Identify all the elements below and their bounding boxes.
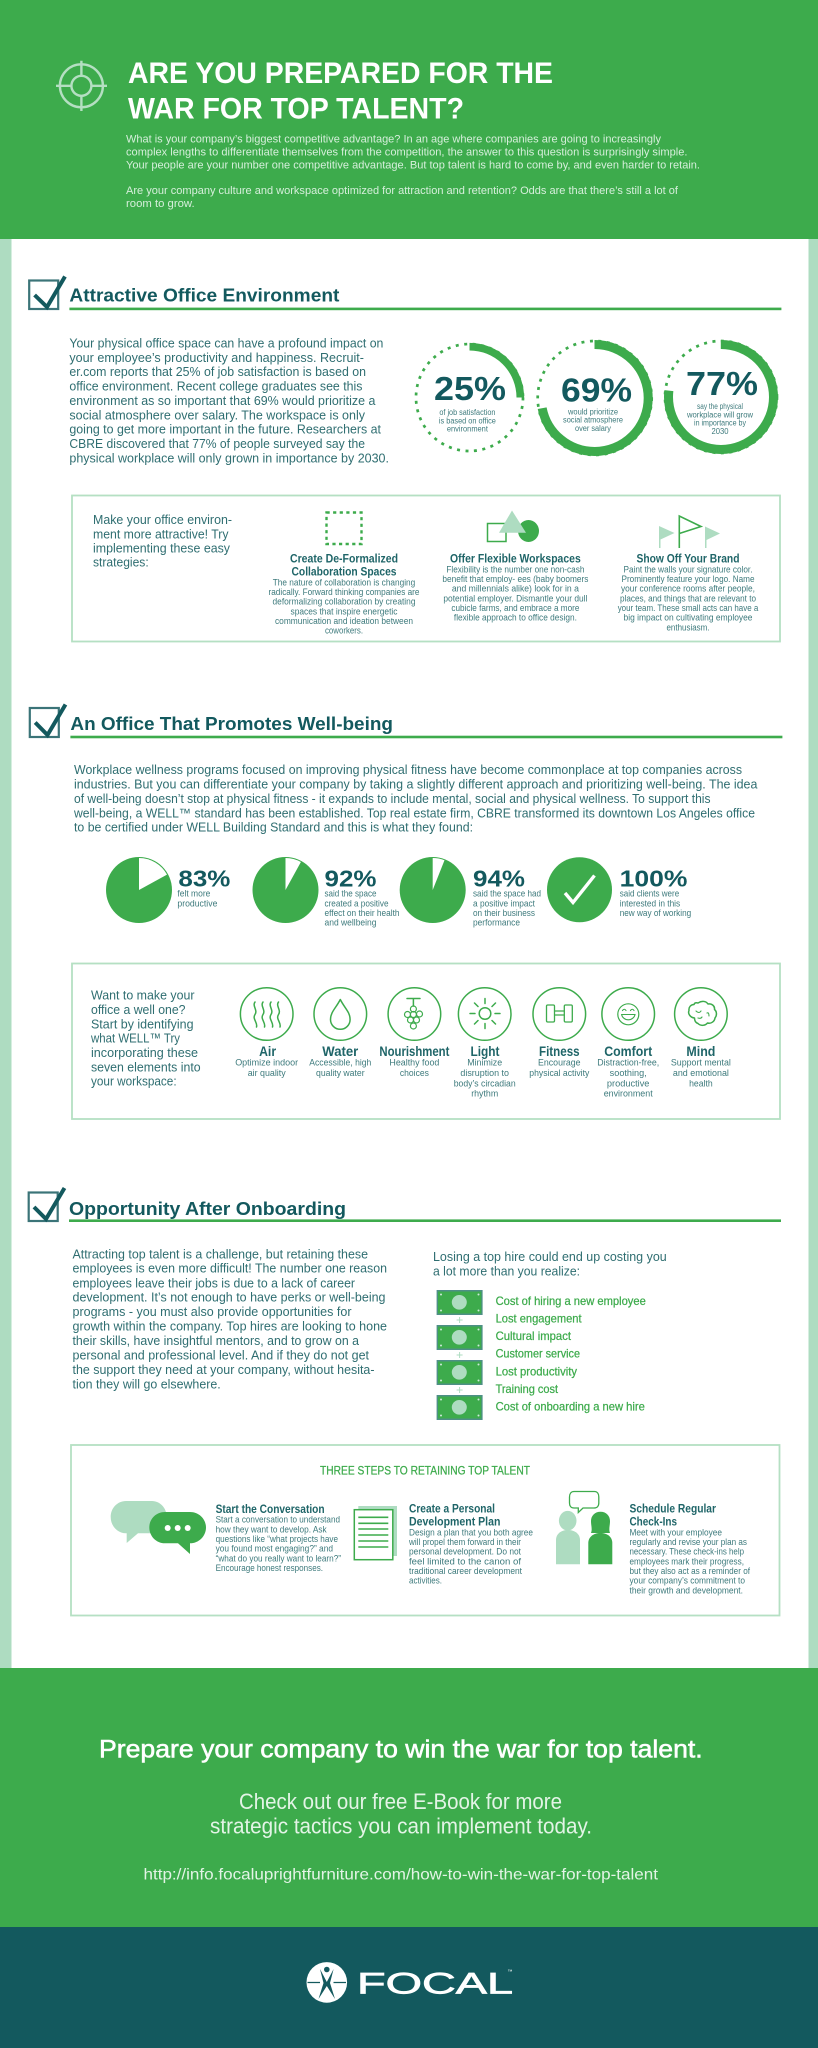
intro paragraph	[126, 134, 700, 210]
text block: intro: strategies:	[93, 555, 149, 570]
pie: 92%	[252, 857, 400, 928]
text block: er.com reports that 25% of job satisfaction is based on	[69, 365, 366, 379]
element: water	[309, 988, 371, 1078]
heading: THREE STEPS TO RETAINING TOP TALENT	[320, 1466, 530, 1478]
icon: shapes	[488, 510, 539, 542]
step: development plan	[408, 1501, 533, 1586]
element: light: rhythm	[471, 1089, 498, 1099]
strategy: show off your brand: your team. These small acts can have a	[618, 603, 758, 613]
heading: An Office That Promotes Well-being	[70, 714, 393, 734]
pie: 94%: a positive impact	[473, 898, 536, 908]
step: regular check-ins: Meet with your employee	[630, 1527, 722, 1537]
heading: Opportunity After Onboarding	[69, 1199, 346, 1219]
donut: 77%: 77%	[686, 365, 758, 402]
element: fitness	[529, 988, 590, 1078]
donut: 77%: workplace will grow	[686, 410, 753, 419]
pie: 94%	[400, 857, 541, 928]
text block: Your physical office space can have a profound impact on	[69, 337, 383, 351]
step: development plan: Design a plan that you both agree	[409, 1527, 533, 1537]
element: mind: Mind	[686, 1044, 715, 1059]
icon: focal logo mark	[306, 1962, 347, 2003]
strategy: collaboration spaces	[268, 551, 420, 635]
strategy: collaboration spaces: deformalizing collaboration by creating	[272, 597, 416, 607]
step: start the conversation: you found most engaging?” and	[216, 1544, 333, 1554]
list: hidden costs	[496, 1294, 646, 1413]
text block: CBRE discovered that 77% of people surveyed say the	[69, 437, 365, 451]
donut: 69%: social atmosphere	[563, 416, 623, 425]
step: regular check-ins: your company’s commitment to	[630, 1576, 745, 1586]
step: start the conversation: Start the Conversation	[216, 1502, 325, 1516]
donut: 69%: over salary	[575, 424, 611, 433]
text block: tion they will go elsewhere.	[72, 1377, 221, 1391]
text block	[73, 763, 757, 835]
list: hidden costs: Lost productivity	[496, 1364, 577, 1378]
text block: intro: implementing these easy	[93, 541, 231, 556]
panel: seven well elements	[72, 964, 780, 1119]
element: light: disruption to	[460, 1068, 509, 1078]
pie: 92%: 92%	[324, 866, 376, 892]
pie: 92%: said the space	[324, 889, 377, 899]
donut: 77%: in importance by	[694, 419, 746, 428]
text block: employees leave their jobs is due to a lack of career	[72, 1276, 355, 1290]
strategy: flexible workspaces	[442, 551, 589, 623]
pie: 92%: effect on their health	[324, 908, 400, 918]
step: start the conversation: questions like “what projects have	[216, 1534, 338, 1544]
text block: intro: what WELL™ Try	[90, 1031, 180, 1046]
donut: 25%: 25%	[434, 370, 506, 407]
donut: 25%: is based on office	[439, 416, 496, 425]
pie: 92%: created a positive	[324, 898, 389, 908]
text block: Workplace wellness programs focused on improving physical fitness have become commonplace at top companies across	[74, 763, 742, 777]
icon: two people talking	[556, 1492, 612, 1564]
list: hidden costs: Lost engagement	[496, 1312, 582, 1326]
icon: checkbox	[29, 1188, 64, 1221]
panel: three steps to retaining top talent	[71, 1445, 780, 1616]
headline: Prepare your company to win the war for top talent.	[99, 1735, 703, 1763]
element: comfort: Comfort	[604, 1044, 653, 1059]
panel: office that promotes well-being	[30, 704, 782, 928]
strategy: collaboration spaces: radically. Forward thinking companies are	[268, 587, 420, 597]
pie: 94%: on their business	[473, 908, 536, 918]
pie: 92%: and wellbeing	[324, 918, 377, 928]
step: development plan: will propel them forward in their	[408, 1537, 521, 1547]
strategy: show off your brand: Prominently feature your logo. Name	[622, 574, 755, 584]
text block: to be certified under WELL Building Standard and this is what they found:	[74, 821, 473, 835]
text block: cost intro	[433, 1250, 667, 1278]
icon: chat bubbles	[111, 1501, 206, 1554]
strategy: flexible workspaces: cubicle farms, and embrace a more	[451, 603, 579, 613]
text block: well-being, a WELL™ standard has been established. Top real estate firm, CBRE transformed its downtown Los Angeles office	[73, 806, 755, 820]
text block: programs - you must also provide opportunities for	[72, 1305, 352, 1319]
text block: intro	[93, 512, 232, 570]
element: mind	[671, 988, 731, 1088]
step: regular check-ins: regularly and revise your plan as	[630, 1537, 748, 1547]
element: mind: and emotional	[673, 1068, 729, 1078]
step: development plan: activities.	[409, 1576, 442, 1586]
element: comfort	[597, 988, 659, 1099]
strategy: flexible workspaces: potential employer. Dismantle your dull	[443, 593, 587, 603]
element: comfort: soothing,	[610, 1068, 647, 1078]
text block: intro: seven elements into	[91, 1059, 201, 1074]
step: regular check-ins: Check-Ins	[630, 1515, 677, 1529]
strategy: collaboration spaces: Create De-Formalized	[290, 551, 398, 565]
strategy: show off your brand	[618, 551, 758, 632]
title	[128, 57, 553, 126]
pie: 94%: said the space had	[473, 889, 541, 899]
intro paragraph: room to grow.	[126, 198, 195, 210]
donut: 77%	[665, 341, 777, 453]
strategy: collaboration spaces: communication and ideation between	[275, 616, 413, 626]
element: nourishment: Nourishment	[379, 1044, 450, 1059]
text block: intro: office a well one?	[91, 1002, 186, 1017]
trademark: ™	[508, 1969, 512, 1975]
text block: of well-being doesn’t stop at physical fitness - it expands to include mental, social and physical wellness. To support this	[74, 792, 710, 806]
element: fitness: Encourage	[538, 1058, 581, 1068]
subtext: strategic tactics you can implement today.	[210, 1813, 592, 1838]
pie: 83%	[106, 857, 230, 923]
subtext: Check out our free E-Book for more	[239, 1789, 562, 1814]
heading: Attractive Office Environment	[69, 286, 339, 306]
text block: industries. But you can differentiate your company by taking a slightly different approach and prioritizing well-being. The idea	[74, 777, 757, 791]
element: air: Air	[259, 1044, 277, 1059]
icon: document	[354, 1506, 397, 1560]
pie: 83%: productive	[177, 898, 217, 908]
text block: social atmosphere over salary. The workspace is only	[69, 408, 366, 422]
text block: intro: ment more attractive! Try	[93, 526, 229, 541]
pie: 83%: 83%	[178, 866, 230, 892]
pie: 94%: 94%	[473, 866, 525, 892]
text block: intro: incorporating these	[91, 1045, 198, 1060]
text block: growth within the company. Top hires are looking to hone	[72, 1319, 387, 1333]
text block: intro: Make your office environ-	[93, 512, 232, 527]
step: development plan: personal development. Do not	[409, 1547, 522, 1557]
step: regular check-ins: Schedule Regular	[630, 1501, 716, 1515]
step: regular check-ins: employees mark their progress,	[630, 1556, 744, 1566]
panel: office strategies	[72, 496, 780, 642]
strategy: collaboration spaces: Collaboration Spaces	[292, 565, 397, 579]
text block	[72, 1247, 387, 1391]
icon: flags	[659, 516, 720, 548]
element: nourishment: choices	[400, 1068, 429, 1078]
panel: opportunity after onboarding	[29, 1188, 781, 1420]
element: nourishment	[379, 988, 450, 1078]
text block: intro: Want to make your	[91, 987, 195, 1002]
donut: 69%: 69%	[561, 372, 632, 409]
step: regular check-ins: necessary. These check-ins help	[630, 1547, 744, 1557]
strategy: show off your brand: your conference rooms after people,	[621, 584, 755, 594]
element: air: air quality	[248, 1068, 286, 1078]
text block	[69, 337, 389, 465]
element: nourishment: Healthy food	[389, 1058, 439, 1068]
element: light	[454, 988, 516, 1099]
panel: call to action	[0, 1668, 818, 1927]
text block: going to get more important in the future. Researchers at	[69, 422, 381, 436]
element: fitness: physical activity	[529, 1068, 590, 1078]
list: hidden costs: Training cost	[496, 1382, 559, 1396]
strategy: flexible workspaces: benefit that employ- ees (baby boomers	[442, 574, 589, 584]
strategy: flexible workspaces: flexible approach to office design.	[454, 613, 577, 623]
strategy: show off your brand: enthusiasm.	[666, 622, 710, 632]
text block: your employee’s productivity and happiness. Recruit-	[69, 351, 364, 365]
element: water: quality water	[316, 1068, 365, 1078]
strategy: show off your brand: big impact on cultivating employee	[624, 613, 753, 623]
list: hidden costs: Cost of onboarding a new hire	[496, 1399, 645, 1413]
step: development plan: feel limited to the canon of	[409, 1556, 522, 1566]
element: air	[235, 988, 298, 1078]
strategy: collaboration spaces: spaces that inspire energetic	[290, 606, 398, 616]
element: air: Optimize indoor	[235, 1058, 298, 1068]
panel: brand footer	[0, 1927, 818, 2048]
element: comfort: environment	[604, 1089, 653, 1099]
pie: 100% with check	[547, 857, 691, 922]
intro paragraph: Are your company culture and workspace optimized for attraction and retention? Odds are that there’s still a lot of	[126, 185, 679, 197]
pie: 100% with check: said clients were	[620, 889, 679, 899]
step: development plan: traditional career development	[409, 1566, 523, 1576]
element: mind: Support mental	[671, 1058, 731, 1068]
strategy: flexible workspaces: Offer Flexible Workspaces	[450, 551, 581, 565]
intro paragraph: complex lengths to differentiate themselves from the competition, the answer to this question is surprisingly simple.	[126, 146, 688, 158]
step: development plan: Create a Personal	[409, 1501, 495, 1515]
element: mind: health	[689, 1078, 713, 1088]
text block: physical workplace will only grown in importance by 2030.	[69, 451, 389, 465]
logotype: FOCAL	[357, 1967, 513, 2000]
icon: checkbox	[30, 704, 66, 737]
icon: checkbox	[29, 276, 65, 309]
icon: money bills	[437, 1290, 483, 1420]
step: regular check-ins: their growth and development.	[630, 1585, 743, 1595]
donut: 69%: would prioritize	[567, 407, 618, 416]
intro paragraph: Your people are your number one competitive advantage. But top talent is hard to come by, and even harder to retain.	[126, 159, 700, 171]
title: ARE YOU PREPARED FOR THE	[128, 57, 553, 90]
strategy: show off your brand: places, and things that are relevant to	[620, 593, 756, 603]
text block: cost intro: Losing a top hire could end up costing you	[433, 1250, 667, 1264]
element: comfort: productive	[607, 1078, 649, 1088]
text block: intro: Start by identifying	[91, 1016, 194, 1031]
icon: target crosshair	[56, 61, 107, 111]
text block: intro	[90, 987, 201, 1089]
element: water: Water	[322, 1044, 359, 1059]
element: light: body’s circadian	[454, 1078, 516, 1088]
step: start the conversation: “what do you really want to learn?”	[216, 1553, 341, 1563]
strategy: collaboration spaces: coworkers.	[325, 625, 363, 635]
donut: 77%: 2030	[712, 427, 729, 436]
list: hidden costs: Cultural impact	[496, 1329, 572, 1343]
text block: cost intro: a lot more than you realize:	[433, 1264, 580, 1278]
donut: 25%	[416, 344, 523, 451]
url: http://info.focaluprightfurniture.com/how-to-win-the-war-for-top-talent	[144, 1866, 659, 1883]
strategy: show off your brand: Paint the walls your signature color.	[624, 564, 752, 574]
text block: the support they need at your company, without hesita-	[72, 1363, 374, 1377]
text block: employees is even more difficult! The number one reason	[72, 1262, 387, 1276]
text block: personal and professional level. And if they do not get	[72, 1348, 369, 1362]
subtext	[210, 1789, 592, 1838]
panel: header	[0, 0, 818, 239]
pie: 100% with check: 100%	[620, 866, 688, 892]
strategy: show off your brand: Show Off Your Brand	[636, 551, 740, 565]
step: development plan: Development Plan	[409, 1515, 500, 1529]
pie: 100% with check: interested in this	[620, 898, 681, 908]
pie: 94%: performance	[473, 918, 520, 928]
text block: development. It’s not enough to have perks or well-being	[72, 1291, 386, 1305]
panel: attractive office environment	[29, 276, 781, 465]
element: water: Accessible, high	[309, 1058, 371, 1068]
text block: their skills, have insightful mentors, and to grow on a	[72, 1334, 359, 1348]
pie: 83%: felt more	[177, 889, 210, 899]
element: fitness: Fitness	[539, 1044, 580, 1059]
step: start the conversation: Encourage honest responses.	[216, 1563, 323, 1573]
list: hidden costs: Customer service	[496, 1347, 580, 1361]
step: regular check-ins	[630, 1501, 751, 1595]
text block: intro: your workspace:	[91, 1074, 177, 1089]
pie: 100% with check: new way of working	[620, 908, 691, 918]
element: light: Minimize	[467, 1058, 502, 1068]
donut: 69%	[538, 341, 652, 455]
element: comfort: Distraction-free,	[597, 1058, 659, 1068]
element: light: Light	[470, 1044, 500, 1059]
step: start the conversation	[216, 1502, 341, 1573]
donut: 25%: of job satisfaction	[439, 408, 495, 417]
step: regular check-ins: but they also act as a reminder of	[630, 1566, 751, 1576]
strategy: flexible workspaces: Flexibility is the number one non-cash	[446, 564, 584, 574]
text block: Attracting top talent is a challenge, but retaining these	[72, 1247, 368, 1261]
title: WAR FOR TOP TALENT?	[128, 92, 464, 126]
step: start the conversation: Start a conversation to understand	[216, 1515, 340, 1525]
icon: dashed square	[326, 512, 362, 544]
donut: 77%: say the physical	[697, 402, 743, 411]
text block: environment as so important that 69% would prioritize a	[69, 394, 375, 408]
text block: office environment. Recent college graduates see this	[69, 380, 362, 394]
strategy: flexible workspaces: and millennials alike) look for in a	[452, 584, 579, 594]
intro paragraph: What is your company’s biggest competitive advantage? In an age where companies are going to increasingly	[126, 134, 661, 146]
list: hidden costs: Cost of hiring a new employee	[496, 1294, 646, 1308]
donut: 25%: environment	[447, 425, 489, 434]
strategy: collaboration spaces: The nature of collaboration is changing	[273, 577, 415, 587]
step: start the conversation: how they want to develop. Ask	[216, 1524, 327, 1534]
